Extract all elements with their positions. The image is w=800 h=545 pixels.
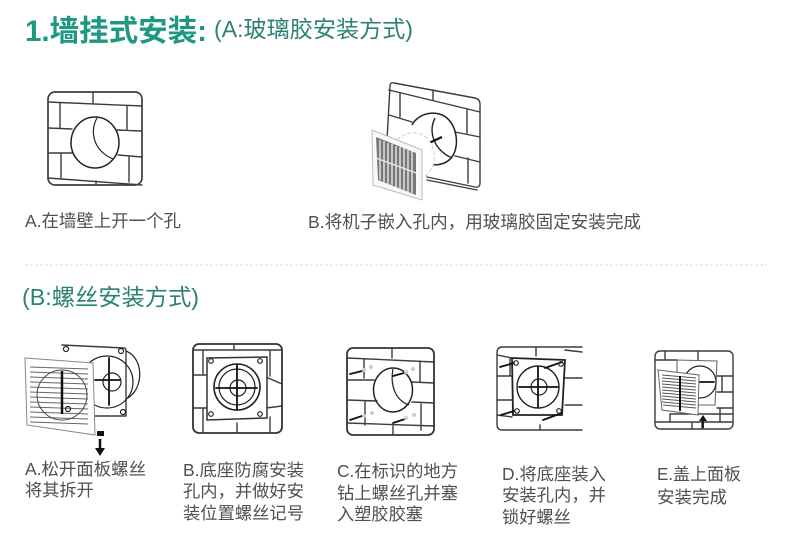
divider: [25, 264, 767, 266]
title: wall mounted installation: (A:玻璃胶安装方式): [214, 16, 413, 42]
caption: drill holes: 钻上螺丝孔并塞: [337, 483, 458, 503]
sub: fan body: [397, 133, 434, 177]
sub: down arrow: [99, 439, 101, 449]
caption: base: B.底座防腐安装: [183, 460, 304, 480]
caption: fix base: 锁好螺丝: [502, 507, 571, 527]
caption: drill holes: C.在标识的地方: [337, 461, 458, 481]
sub: front panel: [658, 370, 699, 415]
icon: finished panel on wall: [655, 351, 733, 429]
caption: remove panel: [25, 459, 146, 500]
icon: remove panel: [25, 345, 140, 456]
caption: fix base: 安装孔内，并: [502, 485, 606, 505]
caption: fix base: [502, 464, 606, 527]
caption: drill holes: 入塑胶胶塞: [337, 504, 423, 524]
caption: base: [183, 460, 304, 523]
sub: up arrow: [702, 420, 704, 428]
caption: finish: E.盖上面板: [657, 464, 741, 484]
icon: wall marks: [347, 348, 434, 435]
title: wall mounted installation: [25, 15, 413, 48]
caption: base: 装位置螺丝记号: [183, 503, 304, 523]
caption: base: 孔内，并做好安: [183, 481, 304, 501]
caption: remove panel: 将其拆开: [25, 480, 94, 500]
caption: remove panel: A.松开面板螺丝: [25, 459, 146, 479]
sub: front panel: [25, 358, 95, 435]
icon: base screwed on: [497, 347, 582, 430]
caption: finish: [657, 464, 741, 507]
heading: screw installation: (B:螺丝安装方式): [22, 284, 199, 310]
caption: finish: 安装完成: [657, 487, 727, 507]
icon: wall with hole: [48, 92, 142, 185]
caption: step B: B.将机子嵌入孔内，用玻璃胶固定安装完成: [308, 212, 641, 232]
caption: drill holes: [337, 461, 458, 524]
icon: fan embedded in wall: [372, 83, 480, 200]
caption: step A: A.在墙壁上开一个孔: [25, 211, 181, 231]
sub: fan grille panel: [372, 130, 422, 200]
icon: base in hole: [193, 344, 282, 433]
caption: fix base: D.将底座装入: [502, 464, 606, 484]
title: wall mounted installation: 1.墙挂式安装:: [25, 15, 207, 48]
